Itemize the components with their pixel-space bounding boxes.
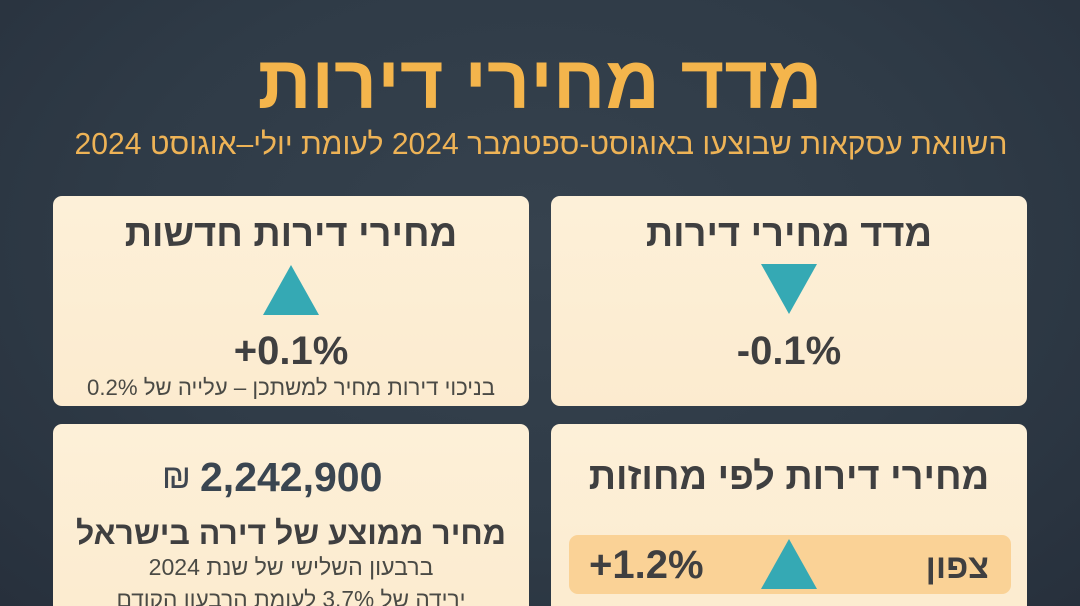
- title: מדד מחירי דירות: [258, 40, 822, 124]
- icon: up triangle: [761, 539, 817, 589]
- icon: down triangle: [761, 264, 817, 314]
- note: third quarter 2024: ברבעון השלישי של שנת 2024: [149, 554, 433, 580]
- heading: average price in Israel: מחיר ממוצע של דירה בישראל: [76, 515, 506, 551]
- panel: new apartment prices: [53, 196, 529, 406]
- panel: prices by district: [551, 424, 1027, 606]
- subtitle: השוואת עסקאות שבוצעו באוגוסט-ספטמבר 2024 לעומת יולי–אוגוסט 2024: [75, 128, 1007, 161]
- heading: housing price index: מדד מחירי דירות: [646, 213, 932, 255]
- note: excluding subsidized apartments: בניכוי דירות מחיר למשתכן – עלייה של 0.2%: [87, 375, 495, 400]
- value: -0.1%: -0.1%: [737, 329, 841, 373]
- heading: new apartment prices: מחירי דירות חדשות: [125, 213, 457, 255]
- icon: shekel sign: ₪: [162, 458, 191, 496]
- panel: average apartment price: [53, 424, 529, 606]
- row: north district: [569, 535, 1011, 594]
- value: +1.2%: +1.2%: [589, 543, 704, 587]
- heading: prices by district: מחירי דירות לפי מחוזות: [589, 456, 989, 498]
- value: average price: 2,242,900: [200, 454, 382, 500]
- district label: צפון: [926, 548, 989, 586]
- value: +0.1%: +0.1%: [234, 329, 348, 373]
- panel: housing price index: [551, 196, 1027, 406]
- icon: up triangle: [263, 265, 319, 315]
